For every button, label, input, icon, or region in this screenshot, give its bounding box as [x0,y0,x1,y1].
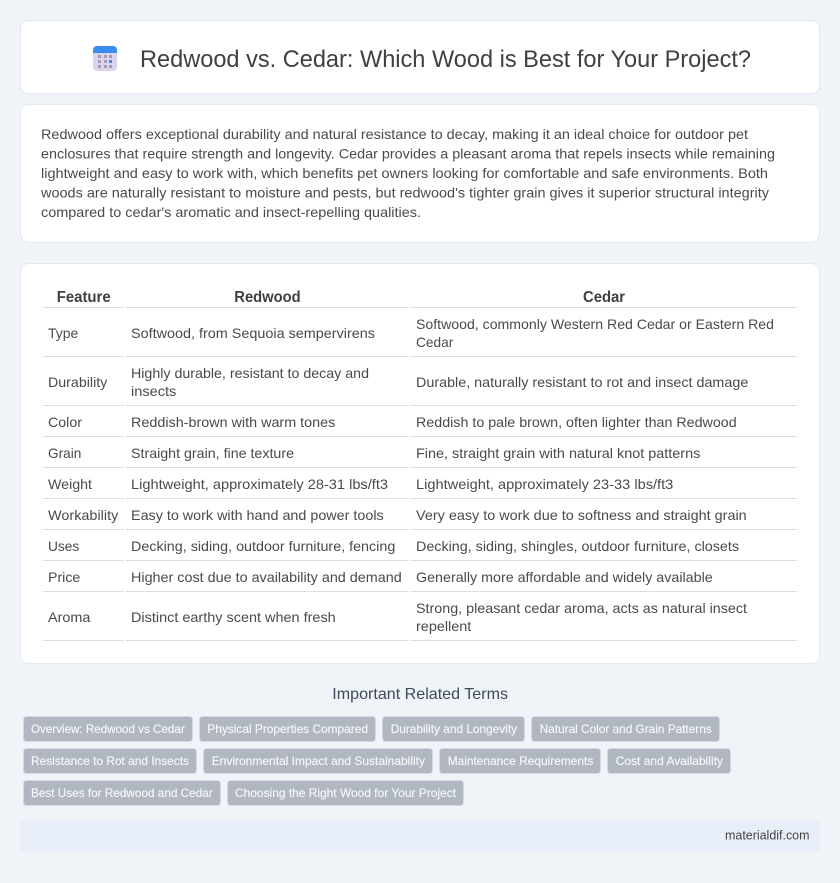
row: weight: Weight [48,476,92,492]
tag [440,748,600,774]
row: weight: Lightweight, approximately 23-33 lbs/ft3 [416,476,674,492]
row: color: Color [48,414,82,430]
text block: summary: compared to cedar's aromatic and insect-repelling qualities. [41,204,421,220]
row: weight [48,476,674,492]
row: color: Reddish-brown with warm tones [131,414,335,430]
tag: Resistance to Rot and Insects [31,754,189,768]
row: price: Generally more affordable and widely available [416,569,713,585]
tag [200,716,376,742]
row: uses [48,538,739,554]
tag: Natural Color and Grain Patterns [540,722,712,736]
table header: Cedar [583,289,625,306]
row: grain: Fine, straight grain with natural knot patterns [416,445,700,461]
heading: related terms: Important Related Terms [332,686,508,703]
tag [228,780,464,806]
row: color [48,414,737,430]
row: price: Price [48,569,81,585]
row: grain: Straight grain, fine texture [131,445,294,461]
tag [24,748,196,774]
text block: summary: Redwood offers exceptional durability and natural resistance to decay, making it an ideal choice for outdoor pet [41,126,748,142]
footer [20,819,820,853]
tag [532,716,720,742]
row: price: Higher cost due to availability and demand [131,569,402,585]
text block: summary [40,126,775,220]
tag [204,748,432,774]
panel: summary paragraph [20,104,820,242]
row: type: Softwood, commonly Western Red Cedar or Eastern Red [416,316,774,332]
row: grain [48,445,700,461]
row: workability: Workability [48,507,118,523]
tag: Overview: Redwood vs Cedar [31,722,185,736]
text block: summary: woods are naturally resistant to moisture and pests, but redwood's tighter grain gives it superior structural integrity [40,184,769,200]
tag: Best Uses for Redwood and Cedar [31,786,213,800]
row: weight: Lightweight, approximately 28-31 lbs/ft3 [131,476,388,492]
tag: Cost and Availability [616,754,723,768]
row: aroma: Aroma [48,609,91,625]
row: price [48,569,713,585]
row: type: Type [48,325,79,341]
row: aroma [48,600,747,634]
row: durability: Durability [48,374,107,390]
tag: Choosing the Right Wood for Your Project [235,786,457,800]
row: type [48,316,774,350]
table header: Redwood [234,289,301,306]
tag [24,780,220,806]
row: color: Reddish to pale brown, often lighter than Redwood [416,414,737,430]
row: uses: Decking, siding, outdoor furniture, fencing [131,538,395,554]
row: durability [48,365,749,399]
text block: summary: lightweight and easy to work with, which benefits pet owners looking for comfortable and safe environments. Both [41,165,768,181]
row: durability: Highly durable, resistant to decay and [131,365,369,381]
tag: Durability and Longevity [391,722,517,736]
section: important related terms [24,686,730,806]
tag [608,748,730,774]
row: type: Softwood, from Sequoia sempervirens [131,325,375,341]
row: uses: Decking, siding, shingles, outdoor furniture, closets [416,538,739,554]
panel: comparison table [20,264,820,664]
row: durability: insects [131,383,176,399]
tag: Physical Properties Compared [207,722,368,736]
tag: Maintenance Requirements [448,754,593,768]
text block: summary: enclosures that require strength and longevity. Cedar provides a pleasant aroma that repels insects while remaining [41,146,775,162]
row: type: Cedar [416,334,454,350]
row: uses: Uses [48,538,79,554]
row: workability: Very easy to work due to softness and straight grain [416,507,747,523]
tag: Environmental Impact and Sustainability [212,754,425,768]
table rules [43,307,797,641]
table header [57,289,625,306]
title: Redwood vs. Cedar: Which Wood is Best for Your Project? [140,46,751,73]
tag [382,716,524,742]
tag [24,716,192,742]
row: aroma: repellent [416,618,471,634]
panel: title header [20,20,820,94]
icon: calendar [93,46,117,71]
row: aroma: Strong, pleasant cedar aroma, acts as natural insect [416,600,747,616]
row: aroma: Distinct earthy scent when fresh [131,609,336,625]
tag list [24,716,730,806]
row: workability [48,507,747,523]
row: workability: Easy to work with hand and power tools [131,507,384,523]
footer source text: materialdif.com [725,828,810,842]
row: durability: Durable, naturally resistant to rot and insect damage [416,374,749,390]
row: grain: Grain [48,445,81,461]
table header: Feature [57,289,111,306]
